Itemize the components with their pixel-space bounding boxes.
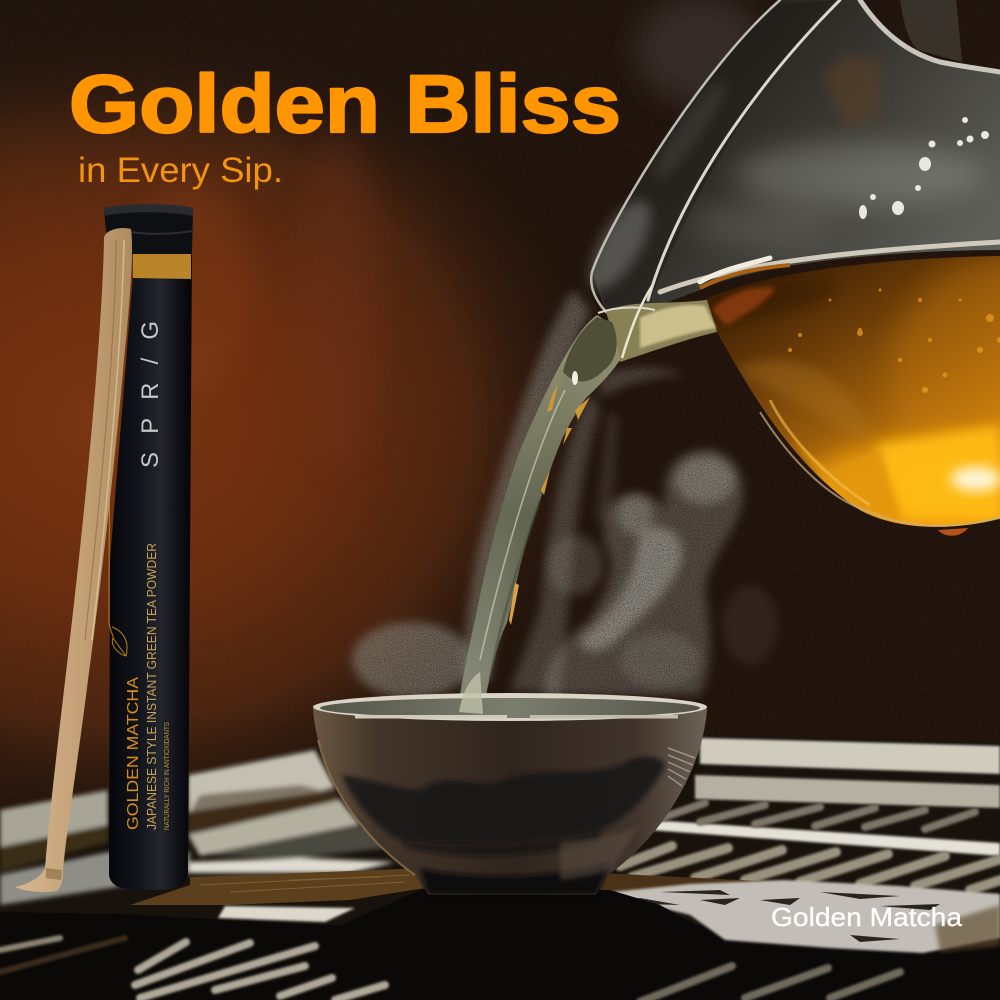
bamboo scoop	[15, 228, 132, 892]
lower left amber streaks	[793, 443, 898, 518]
leaf icon	[109, 280, 127, 656]
product tube	[104, 204, 193, 890]
yellow light patch	[875, 425, 1000, 520]
bowl shadow	[335, 890, 725, 942]
bowl painted band	[342, 757, 665, 844]
bowl rim	[313, 693, 707, 721]
tea sediment dots	[788, 288, 1000, 393]
dark lower tray	[0, 912, 1000, 1000]
wet white tray patch	[601, 880, 1000, 953]
tray rails, left	[0, 750, 395, 905]
bamboo tea tray	[0, 735, 1000, 1000]
gold band	[133, 254, 191, 279]
bowl body	[313, 708, 707, 895]
bowl foot	[420, 862, 610, 895]
subtitle: in Every Sip.	[78, 151, 283, 190]
glass bubbles	[859, 117, 989, 219]
steam puff mass	[544, 450, 743, 695]
spout	[606, 300, 717, 362]
brand name: SPR/G	[137, 321, 164, 468]
stream highlights	[480, 390, 565, 660]
tube body	[109, 250, 192, 890]
tea bowl	[313, 672, 707, 895]
title: Golden Bliss	[69, 59, 621, 150]
bowl stripes	[668, 748, 695, 786]
tube cap	[104, 204, 193, 257]
stream drop near spout	[563, 317, 617, 382]
left pane of glass	[596, 0, 835, 312]
stream into bowl	[459, 672, 483, 714]
product subtitle: JAPANESE STYLE INSTANT GREEN TEA POWDER	[144, 543, 159, 830]
light flare	[951, 467, 1000, 491]
front tray rods	[0, 938, 900, 1000]
steam band beside stream	[462, 290, 590, 690]
bottom drop	[938, 528, 968, 536]
tea stream	[458, 315, 620, 714]
golden tea in pitcher	[704, 256, 1000, 527]
product name caption: Golden Matcha	[771, 902, 963, 932]
pale bulge	[739, 357, 854, 422]
steam clouds	[352, 290, 778, 698]
pitcher glass edges	[591, 0, 1000, 312]
bright steam highlights	[580, 527, 682, 651]
tray rods upper row	[650, 803, 975, 829]
wooden tray surface	[130, 868, 425, 905]
tray rails, right	[650, 738, 1000, 856]
brown reflection in glass	[825, 55, 880, 130]
tray rods lower row	[620, 846, 1000, 890]
pitcher glass body	[592, 0, 1000, 313]
glass pitcher	[578, 0, 1000, 540]
pitcher handle	[900, 0, 962, 62]
product tagline: NATURALLY RICH IN ANTIOXIDANTS	[162, 722, 171, 830]
arch of steam under spout	[600, 368, 685, 398]
glass rim of bowl bottom	[760, 412, 1000, 526]
product title: GOLDEN MATCHA	[125, 676, 142, 830]
